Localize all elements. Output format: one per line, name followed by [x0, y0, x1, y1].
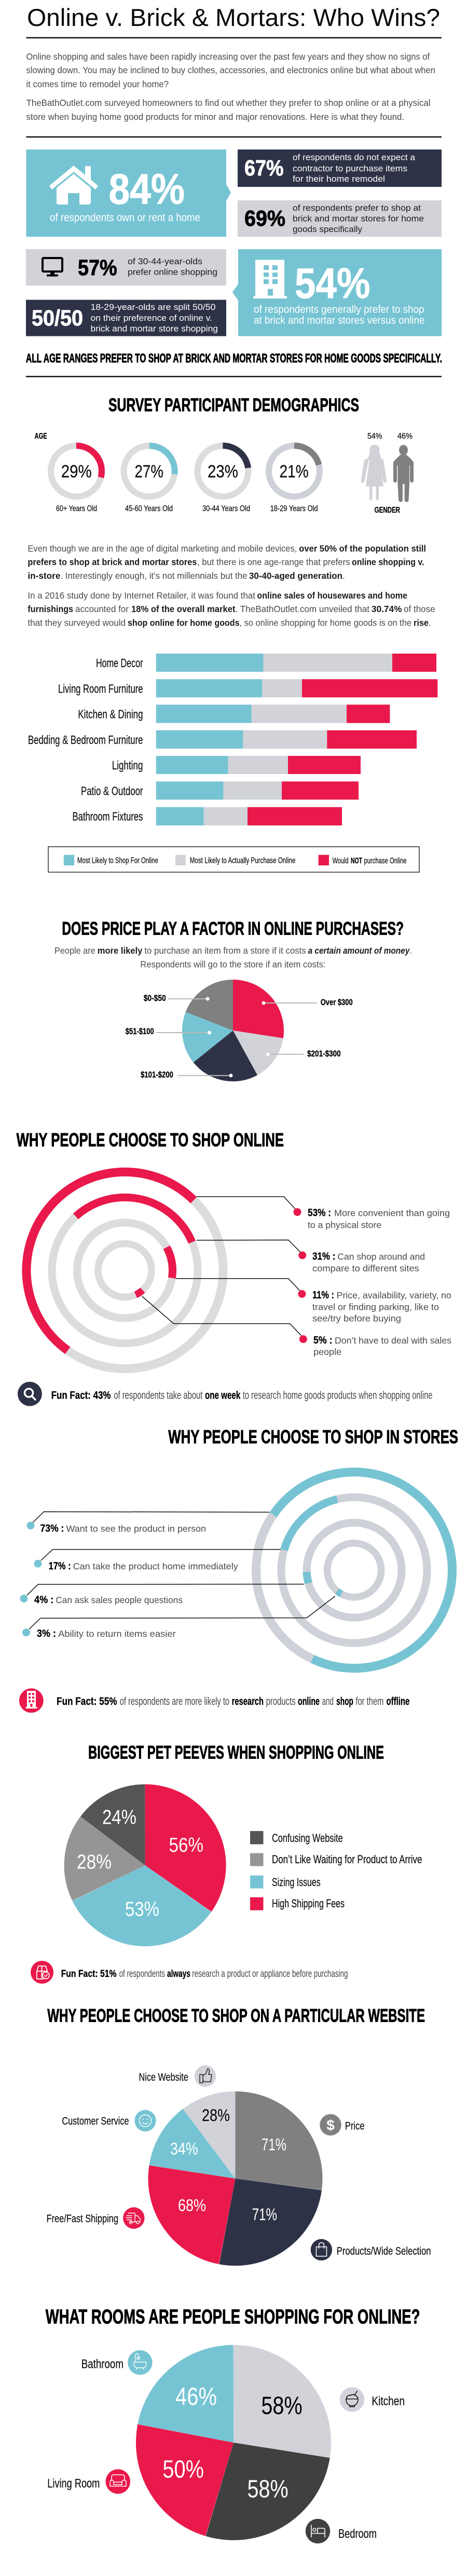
pie labels: price: $201-$300: [307, 1049, 341, 1059]
reason: 5%: [299, 1335, 451, 1357]
label: price: [320, 2114, 365, 2136]
label: bathroom: [81, 2350, 153, 2375]
legend: bar chart: Most Likely to Shop For Online: [77, 857, 158, 865]
reason: 73%: 73% :: [40, 1523, 64, 1535]
icon: bathtub: [128, 2350, 153, 2375]
text block: demographics commentary: .: [429, 618, 431, 628]
text block: demographics commentary: shop online for home goods: [128, 618, 240, 628]
fun fact: always research: [31, 1961, 348, 1984]
text block: demographics commentary: .: [342, 571, 345, 581]
fun fact: research online: and: [322, 1696, 334, 1707]
label: products wide selection: [311, 2239, 431, 2260]
text: 69% caption: goods specifically: [293, 224, 362, 234]
radial chart: why stores: [218, 1434, 467, 1706]
reason: 3%: 3% :: [37, 1628, 56, 1639]
text: 69% caption: brick and mortar stores for home: [293, 214, 424, 223]
list: reasons stores: [20, 1522, 238, 1639]
pie chart: rooms: 58%: [247, 2476, 289, 2503]
panel: 57% prefer online: [26, 249, 226, 286]
reason: 4%: Can ask sales people questions: [56, 1595, 183, 1605]
reason: 31%: 31% :: [312, 1251, 335, 1262]
intro text: [26, 51, 435, 122]
label: kitchen: Kitchen: [372, 2394, 405, 2408]
text block: demographics commentary: 18% of the overall market: [131, 604, 236, 614]
text: 50/50 caption: on their preference of online v.: [90, 313, 212, 323]
pie chart: particular website: 28%: [202, 2106, 230, 2125]
reason: 3%: Ability to return items easier: [58, 1629, 176, 1639]
stat: 50/50: 50/50: [32, 306, 83, 331]
legend: bar chart: Most Likely to Actually Purchase Online: [190, 857, 296, 865]
legend: pet peeves: Don’t Like Waiting for Product to Arrive: [272, 1853, 422, 1866]
stat: 69%: 69%: [244, 206, 285, 231]
legend: pet peeves: Confusing Website: [272, 1832, 343, 1845]
text block: demographics commentary: [28, 543, 435, 628]
label: customer service: Customer Service: [62, 2115, 129, 2127]
fun fact: research online: for them: [355, 1696, 383, 1707]
text block: demographics commentary: rise: [414, 618, 429, 628]
icon: dollar: $: [326, 2117, 335, 2133]
donut: 18-29: 21%: [279, 462, 309, 482]
text block: demographics commentary: . Interestingly enough, it’s not millennials but the: [60, 571, 247, 581]
pie chart: pet peeves: 53%: [125, 1899, 159, 1921]
pie labels: price: [126, 993, 353, 1080]
donut: 30-44: [197, 445, 250, 513]
text: 67% caption: for their home remodel: [293, 174, 385, 184]
text block: demographics commentary: prefers to shop at brick and mortar stores: [28, 557, 197, 567]
fun fact: research online: Fun Fact: 55%: [57, 1696, 117, 1707]
fun fact: research online: [19, 1688, 409, 1713]
stat: 57%: 57%: [78, 255, 117, 280]
leader lines: why stores: [27, 1512, 335, 1629]
bar: kitchen and dining: Kitchen & Dining: [78, 707, 143, 721]
stacked bar chart: [28, 654, 437, 825]
stat: 54%: 54%: [295, 259, 370, 307]
list: reasons online: [294, 1208, 451, 1357]
pie chart: particular website: 68%: [178, 2196, 206, 2215]
text block: demographics commentary: in-store: [28, 571, 61, 581]
panel: 54% prefer brick and mortar: [232, 249, 442, 336]
pie chart: rooms: 58%: [261, 2392, 303, 2420]
donut: 45-60: 45-60 Years Old: [125, 505, 173, 513]
fun fact: research online: shop: [336, 1696, 353, 1707]
fun fact: one week: of respondents take about: [114, 1389, 203, 1401]
label: free fast shipping: [47, 2207, 144, 2229]
text block: demographics commentary: 30-40-aged generation: [249, 571, 342, 581]
text block: demographics commentary: over 50% of the population still: [299, 543, 426, 553]
bar: patio and outdoor: [81, 781, 359, 799]
text: 67% caption: contractor to purchase items: [293, 164, 407, 173]
gender figures: 54%: [367, 432, 382, 441]
text: 67% caption: [293, 153, 416, 184]
bar: bathroom fixtures: Bathroom Fixtures: [73, 810, 143, 823]
pie labels: price: $51-$100: [126, 1026, 154, 1036]
text block: demographics commentary: . TheBathOutlet.com unveiled that: [236, 604, 369, 614]
fun fact: always research: research a product or appliance before purchasing: [192, 1969, 348, 1980]
intro text: store when buying home good products for minor and major renovations. Here is what they found.: [26, 112, 404, 122]
fun fact: research online: research: [232, 1696, 264, 1707]
text block: price intro: People are: [54, 945, 95, 956]
text: 54% caption: [254, 304, 424, 326]
label: living room: [47, 2469, 130, 2494]
text block: price intro: .: [409, 945, 412, 956]
bar: living room furniture: [58, 679, 437, 697]
fun fact: always research: of respondents: [119, 1969, 165, 1980]
reason: 53%: More convenient than going: [334, 1208, 450, 1218]
legend: bar chart: purchase Online: [364, 857, 407, 865]
text block: demographics commentary: 30.74%: [372, 604, 402, 614]
intro text: it comes time to remodel your home?: [26, 79, 169, 89]
text block: demographics commentary: , so online shopping for home goods is on the: [240, 618, 411, 628]
pie chart: particular website: 71%: [252, 2205, 277, 2224]
text block: demographics commentary: of those: [404, 604, 435, 614]
icon: woman: [361, 444, 387, 500]
donut: 30-44: 30-44 Years Old: [202, 505, 250, 513]
intro text: Online shopping and sales have been rapidly increasing over the past few years and they show no signs of: [26, 51, 430, 62]
donut: 60+: 29%: [61, 462, 92, 482]
text block: price intro: to purchase an item from a store if it costs: [144, 945, 306, 956]
text: 54% caption: at brick and mortar stores versus online: [254, 315, 424, 326]
fun fact: research online: of respondents are more likely to: [120, 1696, 229, 1707]
stat: 67%: 67%: [244, 156, 283, 181]
donut: 18-29: 18-29 Years Old: [270, 505, 318, 513]
reason: 5%: 5% :: [313, 1335, 333, 1346]
reason: 5%: Don’t have to deal with sales: [335, 1335, 451, 1346]
reason: 5%: people: [313, 1347, 341, 1357]
text: 54% caption: of respondents generally prefer to shop: [254, 304, 424, 315]
donut: 60+: 60+ Years Old: [56, 505, 97, 513]
icon: shopping bag: [311, 2239, 332, 2260]
text: 57% caption: prefer online shopping: [128, 267, 217, 277]
bar: bedding and bedroom furniture: Bedding & Bedroom Furniture: [28, 733, 143, 747]
legend: pet peeves: [250, 1831, 422, 1910]
text block: price intro: [54, 945, 412, 970]
pie labels: price: $0-$50: [144, 993, 166, 1003]
icon: magnifier: [18, 1382, 42, 1406]
bar: bedding and bedroom furniture: [28, 730, 417, 749]
text: 50/50 caption: [90, 302, 218, 334]
text block: demographics commentary: furnishings: [28, 604, 73, 614]
text block: demographics commentary: , but there is one age-range that prefers: [197, 557, 350, 567]
bar: home decor: Home Decor: [96, 656, 143, 670]
caption: of respondents own or rent a home: [50, 212, 200, 224]
pie chart: rooms: [162, 2382, 303, 2503]
text block: demographics commentary: online sales of housewares and home: [257, 590, 407, 601]
reason: 17%: 17% :: [49, 1561, 71, 1572]
pie chart: rooms: 50%: [162, 2456, 204, 2484]
reason: 17%: Can take the product home immediately: [73, 1561, 238, 1571]
text block: price intro: more likely: [98, 945, 143, 956]
panel: 50/50: [26, 300, 226, 336]
text block: demographics commentary: online shopping v.: [352, 557, 424, 567]
reason: 17%: [34, 1560, 238, 1572]
gender figures: 46%: [397, 432, 413, 441]
donut: 45-60: [124, 445, 175, 513]
label: nice website: Nice Website: [139, 2071, 188, 2083]
label: nice website: [139, 2065, 216, 2087]
icon: bed: [306, 2519, 330, 2543]
text: 50/50 caption: brick and mortar store shopping: [90, 324, 218, 334]
pie chart: particular website: [170, 2106, 296, 2240]
reason: 73%: Want to see the product in person: [66, 1524, 206, 1534]
bar: bathroom fixtures: [73, 807, 342, 825]
legend: pet peeves: High Shipping Fees: [272, 1897, 345, 1910]
icon: house: [49, 166, 98, 205]
donut: 45-60: 27%: [135, 462, 163, 482]
pie chart: particular website: 71%: [262, 2135, 286, 2154]
icon: bowl: [340, 2387, 364, 2412]
pie chart: particular website: 34%: [170, 2139, 198, 2158]
icon: thumbs up: [195, 2065, 216, 2087]
age donut charts: [35, 432, 320, 513]
pie labels: price: $101-$200: [141, 1070, 173, 1080]
gender figures: [361, 432, 414, 515]
pie chart: price: [197, 995, 269, 1066]
radial chart: why online: [0, 1133, 262, 1407]
panel: 69% prefer brick and mortar: [238, 200, 442, 237]
bar: kitchen and dining: [78, 704, 390, 723]
icon: man: [393, 445, 414, 502]
fun fact: one week: one week: [205, 1389, 241, 1401]
fun fact: research online: online: [298, 1696, 320, 1707]
label: products wide selection: Products/Wide Selection: [337, 2245, 431, 2257]
bar: living room furniture: Living Room Furniture: [58, 682, 143, 695]
intro text: TheBathOutlet.com surveyed homeowners to find out whether they prefer to shop online or at a physical: [26, 98, 431, 108]
reason: 11%: [298, 1290, 451, 1324]
panel: 67% contractor: [238, 150, 442, 187]
text block: demographics commentary: Even though we are in the age of digital marketing and mobile devices,: [28, 543, 297, 553]
pie chart: pet peeves: 24%: [102, 1807, 136, 1829]
title: Online v. Brick & Mortars: Who Wins?: [27, 4, 440, 31]
panel: 84% own or rent a home: [26, 150, 231, 237]
icon: store building: [19, 1688, 44, 1713]
stat: 84%: 84%: [109, 165, 185, 213]
fun fact: research online: offline: [386, 1696, 409, 1707]
legend: bar chart: [48, 847, 419, 872]
text: 50/50 caption: 18-29-year-olds are split 50/50: [90, 302, 216, 312]
fun fact: one week: [18, 1382, 433, 1406]
text block: demographics commentary: In a 2016 study done by Internet Retailer, it was found that: [28, 590, 255, 601]
legend: bar chart: Would: [333, 857, 349, 865]
icon: sofa: [106, 2469, 130, 2494]
icon: delivery truck: [123, 2207, 144, 2229]
pie chart: pet peeves: [77, 1807, 203, 1922]
reason: 31%: [298, 1251, 425, 1273]
reason: 73%: [27, 1522, 206, 1535]
reason: 11%: 11% :: [312, 1290, 334, 1301]
donut: 30-44: 23%: [208, 462, 238, 482]
heading: demographics: SURVEY PARTICIPANT DEMOGRAPHICS: [108, 395, 359, 415]
text block: demographics commentary: that they surveyed would: [28, 618, 126, 628]
bar: lighting: Lighting: [112, 758, 143, 772]
fun fact: research online: products: [266, 1696, 296, 1707]
label: free fast shipping: Free/Fast Shipping: [47, 2213, 118, 2225]
text: 57% caption: [128, 256, 217, 277]
bar: patio and outdoor: Patio & Outdoor: [81, 784, 143, 797]
text: 67% caption: of respondents do not expect a: [293, 153, 416, 162]
text: 57% caption: of 30-44-year-olds: [128, 256, 202, 266]
reason: 31%: compare to different sites: [312, 1263, 419, 1273]
icon: monitor: [43, 258, 62, 276]
heading: why online: WHY PEOPLE CHOOSE TO SHOP ONLINE: [17, 1129, 284, 1150]
reason: 31%: Can shop around and: [337, 1251, 425, 1262]
bar: lighting: [112, 756, 361, 774]
label: bathroom: Bathroom: [81, 2357, 123, 2371]
text: 69% caption: [293, 203, 424, 234]
donut: 18-29: [269, 445, 320, 513]
reason: 11%: travel or finding parking, like to: [312, 1302, 439, 1312]
reason: 53%: [294, 1208, 450, 1230]
gender figures: GENDER: [375, 506, 400, 515]
icon: package with check: [31, 1961, 53, 1984]
pie chart: pet peeves: 56%: [169, 1834, 203, 1856]
pie chart: rooms: 46%: [175, 2383, 217, 2411]
reason: 53%: 53% :: [308, 1208, 331, 1219]
bar: home decor: [96, 654, 436, 672]
fun fact: always research: always: [167, 1969, 190, 1980]
leader lines: why online: [142, 1197, 301, 1336]
fun fact: one week: Fun Fact: 43%: [51, 1389, 111, 1401]
legend: pet peeves: Sizing Issues: [272, 1876, 321, 1889]
reason: 11%: see/try before buying: [312, 1313, 401, 1324]
legend: bar chart: NOT: [351, 857, 362, 865]
text block: price intro: a certain amount of money: [308, 945, 410, 956]
reason: 53%: to a physical store: [308, 1219, 381, 1230]
label: kitchen: [340, 2387, 405, 2412]
label: living room: Living Room: [47, 2477, 100, 2491]
donut: 60+: [51, 445, 102, 513]
text block: demographics commentary: accounted for: [75, 604, 129, 614]
pie labels: price: Over $300: [321, 997, 353, 1007]
label: customer service: [62, 2110, 156, 2132]
label: price: Price: [345, 2120, 365, 2132]
reason: 4%: 4% :: [34, 1594, 53, 1606]
reason: 11%: Price, availability, variety, no: [337, 1290, 451, 1300]
label: bedroom: Bedroom: [338, 2527, 377, 2541]
text block: price intro: Respondents will go to the store if an item costs:: [140, 959, 325, 970]
intro text: slowing down. You may be inclined to buy clothes, accessories, and electronics online but what about when: [26, 65, 435, 75]
label: age: AGE: [35, 432, 47, 441]
reason: 3%: [22, 1628, 176, 1639]
fun fact: always research: Fun Fact: 51%: [61, 1969, 117, 1980]
icon: building: [253, 260, 287, 299]
pie chart: pet peeves: 28%: [77, 1851, 112, 1873]
label: bedroom: [306, 2519, 377, 2543]
icon: smiley: [134, 2110, 156, 2132]
text: 69% caption: of respondents prefer to shop at: [293, 203, 421, 213]
